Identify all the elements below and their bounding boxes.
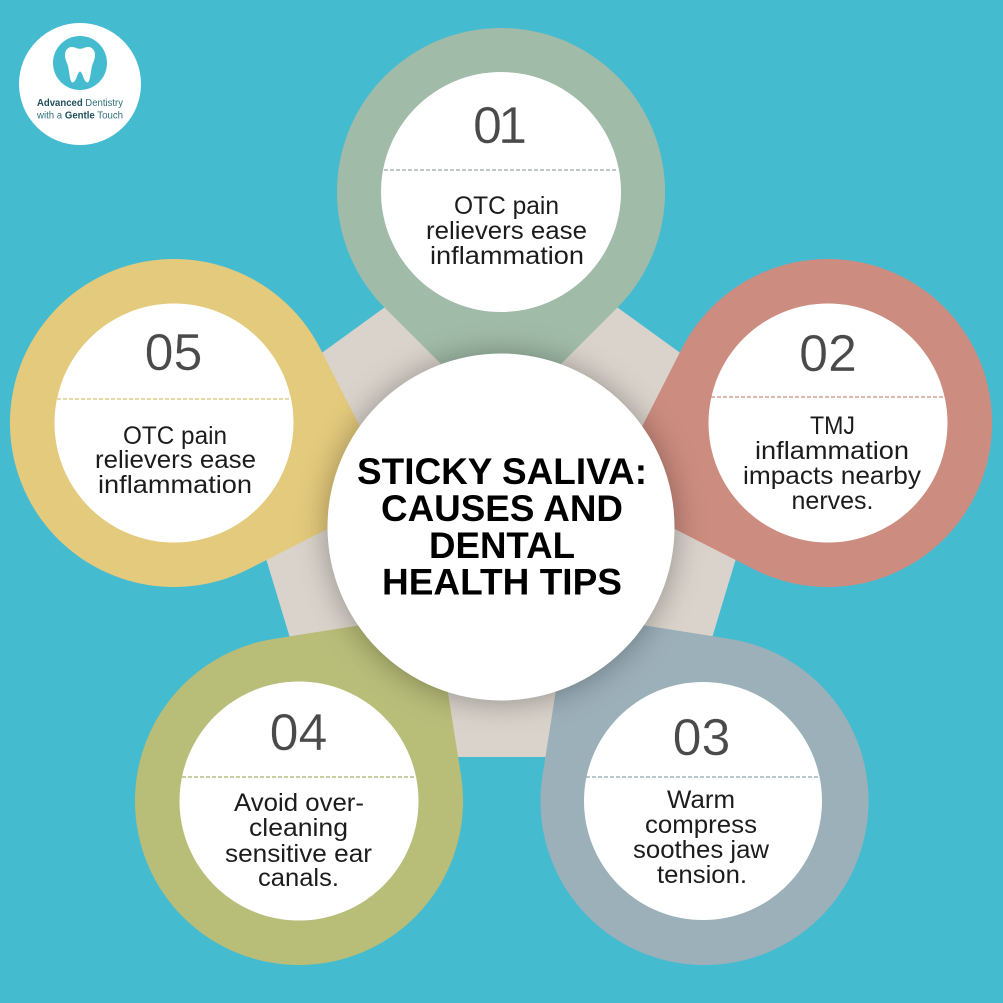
- icon: tooth: [53, 36, 107, 90]
- title: CAUSES AND: [381, 487, 623, 529]
- text 03: tension.: [657, 861, 747, 889]
- text 04: Avoid over-: [234, 789, 364, 817]
- panel: 01: [337, 28, 665, 424]
- text 02: nerves.: [792, 487, 874, 515]
- text 02: impacts nearby: [743, 462, 922, 490]
- number 01: 01: [473, 97, 527, 155]
- text 01: OTC pain: [454, 192, 559, 220]
- center circle with title: [328, 354, 674, 700]
- logo badge: [19, 23, 141, 145]
- panel: 05: [0, 216, 445, 651]
- text 01: [426, 192, 587, 270]
- central pentagon: [225, 223, 777, 757]
- number 03: 03: [673, 709, 730, 767]
- logo text: with a Gentle Touch: [36, 110, 123, 122]
- text 04: cleaning: [249, 814, 348, 842]
- title: HEALTH TIPS: [382, 560, 622, 602]
- text 03: soothes jaw: [633, 836, 770, 864]
- number 05: 05: [145, 324, 202, 382]
- text 05: relievers ease: [95, 446, 256, 474]
- text 02: inflammation: [755, 437, 909, 465]
- text 04: sensitive ear: [225, 840, 372, 868]
- text 01: relievers ease: [426, 217, 587, 245]
- text 05: inflammation: [98, 471, 252, 499]
- number 04: 04: [270, 704, 327, 762]
- logo text: Advanced Dentistry: [37, 97, 124, 109]
- text 02: TMJ: [810, 412, 855, 440]
- panel: 02: [557, 216, 1003, 651]
- text 03: compress: [645, 811, 757, 839]
- text 04: canals.: [258, 864, 339, 892]
- panel: 04: [70, 517, 568, 1003]
- number 02: 02: [799, 325, 857, 383]
- title: [357, 450, 647, 602]
- logo text: [36, 97, 124, 122]
- text 03: Warm: [667, 786, 735, 814]
- panel: 03: [435, 517, 934, 1003]
- text 03: [633, 786, 770, 889]
- text 05: [95, 422, 256, 499]
- text 02: [743, 412, 922, 515]
- text 04: [225, 789, 372, 892]
- text 05: OTC pain: [123, 422, 227, 450]
- text 01: inflammation: [430, 242, 584, 270]
- title: DENTAL: [429, 524, 575, 566]
- title: STICKY SALIVA:: [357, 450, 647, 492]
